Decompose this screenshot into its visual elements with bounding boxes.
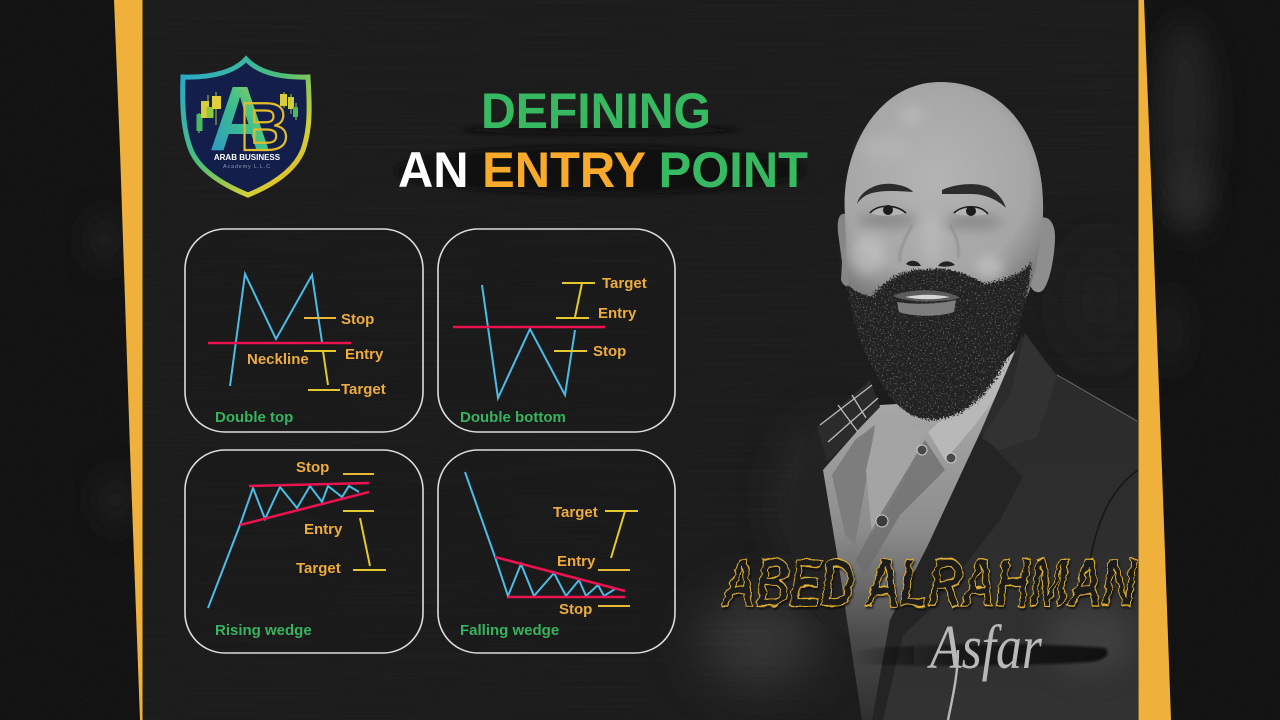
- logo letters: A: [209, 68, 271, 170]
- target label: Target: [341, 381, 386, 398]
- double bottom price line: [482, 285, 575, 398]
- rising wedge price line: [208, 486, 359, 608]
- entry label: Entry: [345, 346, 384, 363]
- portrait: right ear: [1028, 217, 1055, 292]
- title: [398, 83, 808, 198]
- stop label: Stop: [559, 601, 592, 618]
- panel: rising wedge: [185, 450, 423, 653]
- portrait: plaid collar: [817, 380, 880, 462]
- title line 2: AN ENTRY POINT: [398, 142, 808, 198]
- portrait: beard: [848, 262, 1032, 420]
- stop marker: [598, 605, 630, 607]
- portrait: left ear: [838, 214, 849, 287]
- target label: Target: [553, 504, 598, 521]
- rising wedge caption: Rising wedge: [215, 622, 312, 639]
- title line 1: DEFINING: [481, 83, 711, 139]
- portrait: [780, 82, 1138, 720]
- portrait: left shoulder: [801, 460, 835, 550]
- stop marker: [554, 350, 587, 352]
- logo name: ARAB BUSINESS: [214, 153, 281, 162]
- falling wedge caption: Falling wedge: [460, 622, 559, 639]
- wedge boundaries: [495, 557, 625, 597]
- target to entry marker: [556, 283, 595, 318]
- logo shield: [183, 59, 309, 195]
- double top price line: [230, 274, 322, 386]
- stop label: Stop: [341, 311, 374, 328]
- entry to target marker: [304, 351, 340, 390]
- logo shield: B: [240, 89, 289, 165]
- falling wedge price line: [465, 472, 615, 596]
- left yellow frame band: [114, 0, 142, 720]
- portrait: face highlights: [850, 106, 1004, 280]
- stop label: Stop: [296, 459, 329, 476]
- stop marker: [343, 473, 374, 475]
- stop label: Stop: [593, 343, 626, 360]
- panel: double bottom: [438, 229, 675, 432]
- stop marker: [304, 317, 336, 319]
- portrait: eyebrows: [857, 184, 1006, 208]
- logo candles right: [280, 92, 298, 120]
- double bottom caption: Double bottom: [460, 409, 566, 426]
- panel: falling wedge: [438, 450, 675, 653]
- portrait: shirt: [823, 340, 1027, 720]
- portrait: lips: [893, 290, 960, 316]
- entry marker: [598, 569, 630, 571]
- portrait: head: [844, 82, 1044, 299]
- signature brush stroke: [850, 644, 1108, 666]
- portrait: collar buttons: [876, 445, 956, 527]
- target label: Target: [602, 275, 647, 292]
- neckline label: Neckline: [247, 351, 309, 368]
- portrait: eyes: [870, 205, 988, 216]
- entry label: Entry: [304, 521, 343, 538]
- presenter signature: [927, 614, 1043, 720]
- logo candles left: [196, 92, 221, 133]
- portrait: nose: [900, 225, 959, 267]
- presenter signature: Asfar: [927, 614, 1043, 682]
- entry to target marker: [343, 511, 386, 570]
- right yellow frame band: [1138, 0, 1171, 720]
- target marker: [605, 511, 638, 558]
- neckline: [208, 342, 351, 344]
- portrait: jacket: [872, 333, 1138, 720]
- logo subtitle: Academy L.L.C: [223, 164, 271, 170]
- target label: Target: [296, 560, 341, 577]
- entry label: Entry: [598, 305, 637, 322]
- double top caption: Double top: [215, 409, 293, 426]
- entry label: Entry: [557, 553, 596, 570]
- inner dark board: [142, 0, 1139, 720]
- panel: double top: [185, 229, 423, 432]
- wedge boundaries: [240, 483, 369, 525]
- title brush shadows: [395, 126, 805, 194]
- neckline: [453, 326, 605, 328]
